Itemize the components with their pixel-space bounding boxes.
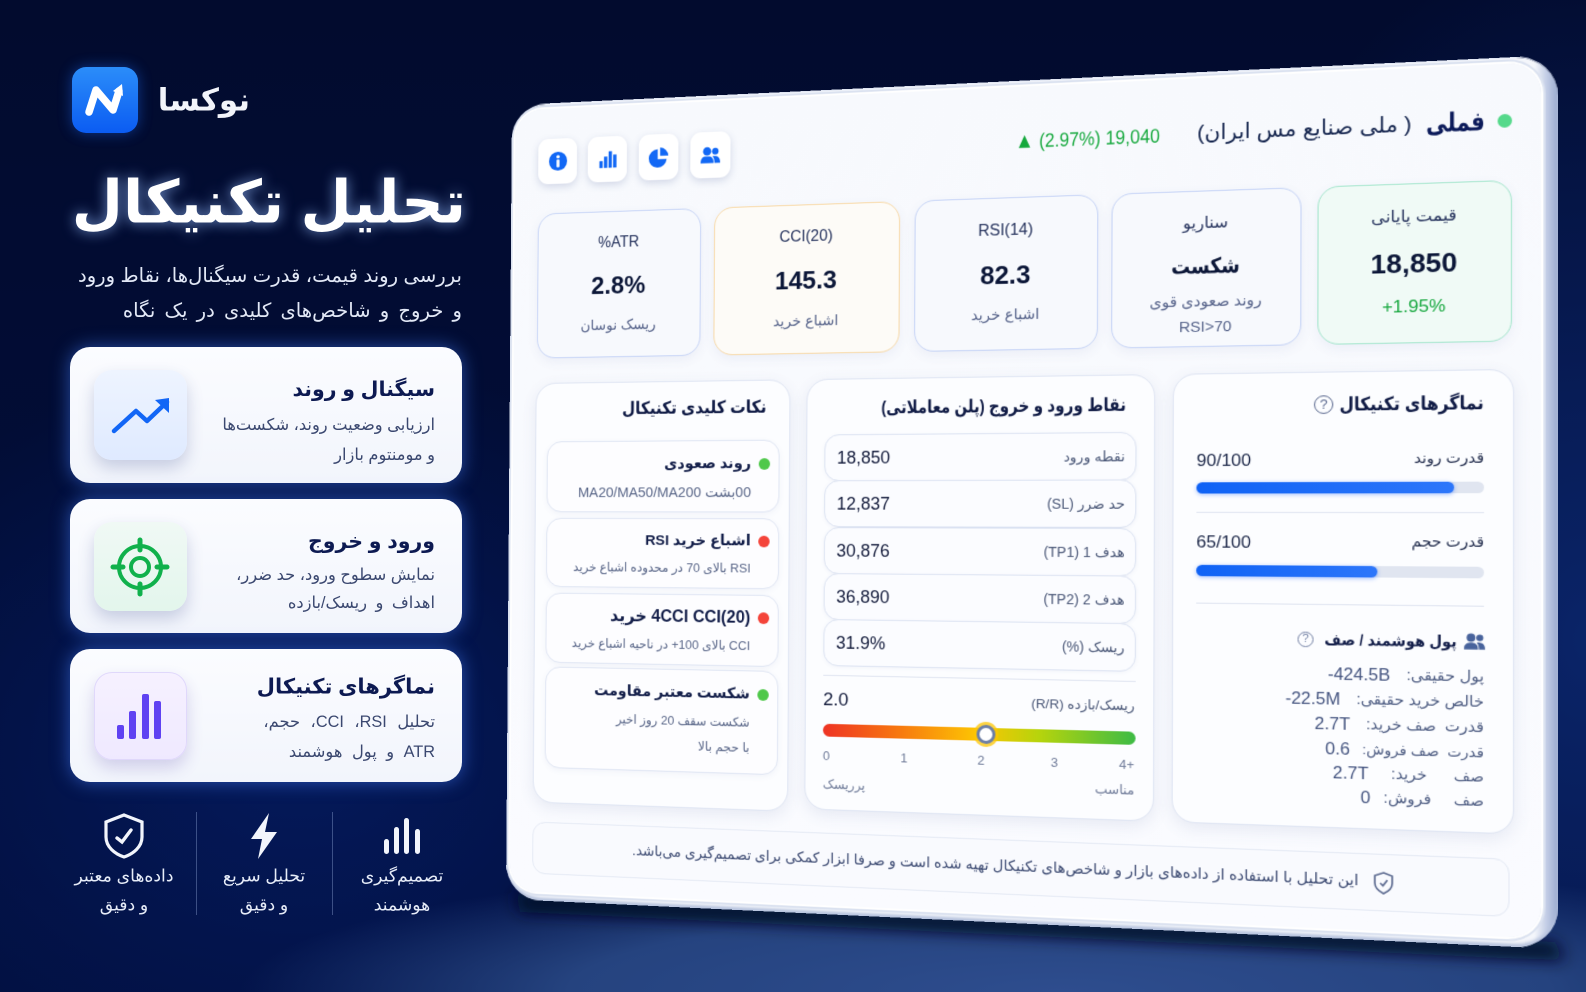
line: buy queue: صف خرید: <box>1391 766 1484 786</box>
feature text: تحلیل سریع <box>223 865 305 885</box>
note text: CCI بالای 100+ در ناحیه اشباع خرید <box>572 635 750 652</box>
label: RSI(14) <box>978 221 1033 240</box>
label: هدف 2 (TP2) <box>1043 591 1125 608</box>
value: 18,850 <box>837 448 890 468</box>
stock symbol: فملی <box>1426 107 1485 139</box>
card: entry and exit <box>70 499 462 633</box>
icon: shield <box>1373 871 1394 895</box>
label: %ATR <box>598 234 639 251</box>
feature: reliable data <box>74 813 173 915</box>
status dot <box>758 536 770 547</box>
button: bars <box>588 136 627 183</box>
risk reward gauge <box>823 724 1136 745</box>
value: 30,876 <box>836 541 890 561</box>
value: 31.9% <box>836 633 885 653</box>
value: 145.3 <box>775 265 837 295</box>
trend strength bar <box>1196 482 1484 494</box>
note: resistance breakout <box>545 666 778 775</box>
icon: trend arrow <box>94 370 187 460</box>
label: هدف 1 (TP1) <box>1043 544 1125 560</box>
trend strength value: 90/100 <box>1197 450 1251 470</box>
risk reward value: 2.0 <box>823 689 849 710</box>
row: entry <box>824 432 1137 481</box>
status dot <box>759 458 770 470</box>
buy queue power value: 2.7T <box>1314 714 1350 734</box>
card text: ارزیابی وضعیت روند، شکست‌ها <box>222 416 435 434</box>
line: net real buy: خالص خرید حقیقی: <box>1356 691 1484 711</box>
icon: lightning <box>251 813 277 859</box>
feature text: تصمیم‌گیری <box>361 865 443 885</box>
live price: ▲ (2.97%) 19,040 <box>1015 125 1160 153</box>
trend strength label: قدرت روند <box>1414 450 1484 467</box>
row: target 2 <box>824 573 1136 624</box>
gauge knob <box>976 725 995 744</box>
icon: smart money <box>1464 632 1486 650</box>
note: روند صعودی قوی <box>1149 291 1262 311</box>
note: CCI buy <box>545 593 779 667</box>
volume strength label: قدرت حجم <box>1411 534 1484 551</box>
feature text: داده‌های معتبر <box>74 865 173 885</box>
label: ریسک (%) <box>1062 638 1125 655</box>
row: target 1 <box>824 527 1136 577</box>
smart money heading: پول هوشمند / صف <box>1324 631 1456 651</box>
stat card: close price <box>1317 180 1512 345</box>
panel: key technical notes <box>533 379 790 812</box>
card heading: ورود و خروج <box>308 530 435 553</box>
stat card: RSI <box>914 194 1098 352</box>
risk reward label: ریسک/بازده (R/R) <box>1031 696 1135 714</box>
icon: target <box>94 522 187 611</box>
title: تحلیل تکنیکال <box>72 170 466 236</box>
panel: entry and exit plan <box>804 374 1155 822</box>
icon: shield <box>104 813 144 859</box>
card text: نمایش سطوح ورود، حد ضرر، <box>236 566 435 584</box>
label: حد ضرر (SL) <box>1047 496 1125 512</box>
icon: help <box>1314 395 1333 414</box>
logo <box>72 67 138 133</box>
note: uptrend <box>547 440 780 512</box>
button: people <box>690 131 731 179</box>
card text line 2: ATR و پول هوشمند <box>289 743 435 761</box>
row: stop loss <box>824 479 1136 528</box>
tick 0: 0 <box>823 748 830 763</box>
note: اشباع خرید <box>773 312 838 330</box>
note: ریسک نوسان <box>580 316 656 334</box>
heading: نکات کلیدی تکنیکال <box>622 397 767 418</box>
note title: 4CCI CCI(20) خرید <box>610 606 750 627</box>
card heading: سیگنال و روند <box>292 378 435 401</box>
line: real money: پول حقیقی: <box>1406 667 1484 686</box>
high risk label: پرریسک <box>823 776 865 792</box>
net real buy value: -22.5M <box>1285 689 1340 709</box>
icon: signal bars <box>384 818 420 854</box>
value: شکست <box>1171 254 1240 279</box>
value: 82.3 <box>980 259 1031 290</box>
note title: روند صعودی <box>664 456 751 472</box>
volume strength bar <box>1196 565 1484 578</box>
note title: شکست معتبر مقاومت <box>594 683 750 703</box>
label: CCI(20) <box>779 228 833 246</box>
change: +1.95% <box>1382 295 1446 316</box>
footer disclaimer <box>532 822 1510 917</box>
volume strength value: 65/100 <box>1196 532 1251 551</box>
icon: smart money help: ? <box>1302 633 1309 645</box>
brand name: نوکسا <box>158 82 250 118</box>
line: sell queue: صف فروش: <box>1383 790 1484 810</box>
real money value: -424.5B <box>1328 665 1390 685</box>
buy queue value: 2.7T <box>1333 763 1368 783</box>
tick 3: 3 <box>1051 754 1058 769</box>
stat card: ATR <box>537 208 701 359</box>
tick 2: 2 <box>977 752 985 767</box>
dashboard panel <box>506 56 1558 948</box>
tick 1: 1 <box>900 750 908 765</box>
note: RSI overbought <box>546 518 779 589</box>
stat card: CCI <box>713 201 900 355</box>
heading: نماگرهای تکنیکال <box>1340 392 1484 415</box>
feature text line 2: و دقیق <box>100 894 148 914</box>
value: 36,890 <box>836 587 890 607</box>
status dot <box>758 612 769 624</box>
line: sell queue power: قدرت صف فروش: <box>1362 742 1484 761</box>
heading: نقاط ورود و خروج (پلن معاملاتی) <box>881 395 1126 417</box>
icon: help: ? <box>1320 396 1328 412</box>
label: قیمت پایانی <box>1371 207 1457 227</box>
icon: smart money help <box>1298 632 1314 647</box>
value: 2.8% <box>591 270 645 300</box>
note: اشباع خرید <box>971 305 1040 324</box>
company name: ( ملی صنایع مس ایران) <box>1197 112 1412 145</box>
card heading: نماگرهای تکنیکال <box>257 676 435 698</box>
panel: technical indicators <box>1172 369 1514 835</box>
button: pie chart <box>639 133 679 181</box>
button: info <box>538 138 577 185</box>
subtitle: و خروج و شاخص‌های کلیدی در یک نگاه <box>123 300 462 322</box>
sell queue power value: 0.6 <box>1325 739 1350 759</box>
disclaimer text: این تحلیل با استفاده از داده‌های بازار و شاخص‌های تکنیکال تهیه شده است و صرفا ابزار کمکی برای تصمیم‌گیری می‌باشد. <box>632 843 1359 889</box>
note text: RSI بالای 70 در محدوده اشباع خرید <box>573 559 751 575</box>
note text: شکست سقف 20 روز اخیر <box>616 711 750 729</box>
status dot <box>757 689 769 701</box>
note text: 00بشت MA20/MA50/MA200 <box>578 484 751 500</box>
note line 2: RSI>70 <box>1179 317 1232 336</box>
card text line 2: اهداف و ریسک/بازده <box>288 594 435 612</box>
good label: مناسب <box>1095 781 1134 797</box>
label: نقطه ورود <box>1064 448 1125 465</box>
note text line 2: با حجم بالا <box>698 738 750 754</box>
card text: تحلیل RSI‏، CCI‏، حجم، <box>263 713 435 731</box>
feature: fast analysis <box>223 813 305 915</box>
card: signal and trend <box>70 347 462 483</box>
value: 18,850 <box>1370 246 1457 280</box>
feature text line 2: و دقیق <box>240 894 288 914</box>
sell queue value: 0 <box>1361 788 1371 807</box>
subtitle <box>78 264 462 322</box>
status dot <box>1498 114 1512 128</box>
line: buy queue power: قدرت صف خرید: <box>1366 717 1484 736</box>
stat card: scenario <box>1111 187 1302 349</box>
card: technical indicators <box>70 649 462 782</box>
feature: smart decision <box>361 818 443 914</box>
tick 4+: 4+ <box>1119 756 1134 772</box>
note title: اشباع خرید RSI <box>645 533 751 549</box>
row: risk <box>823 619 1136 672</box>
value: 12,837 <box>837 494 890 514</box>
icon: purple bars <box>94 672 187 760</box>
card text line 2: و مومنتوم بازار <box>334 446 435 464</box>
feature text line 2: هوشمند <box>374 894 430 914</box>
label: سناریو <box>1183 214 1228 233</box>
subtitle: بررسی روند قیمت، قدرت سیگنال‌ها، نقاط ورود <box>78 265 462 287</box>
